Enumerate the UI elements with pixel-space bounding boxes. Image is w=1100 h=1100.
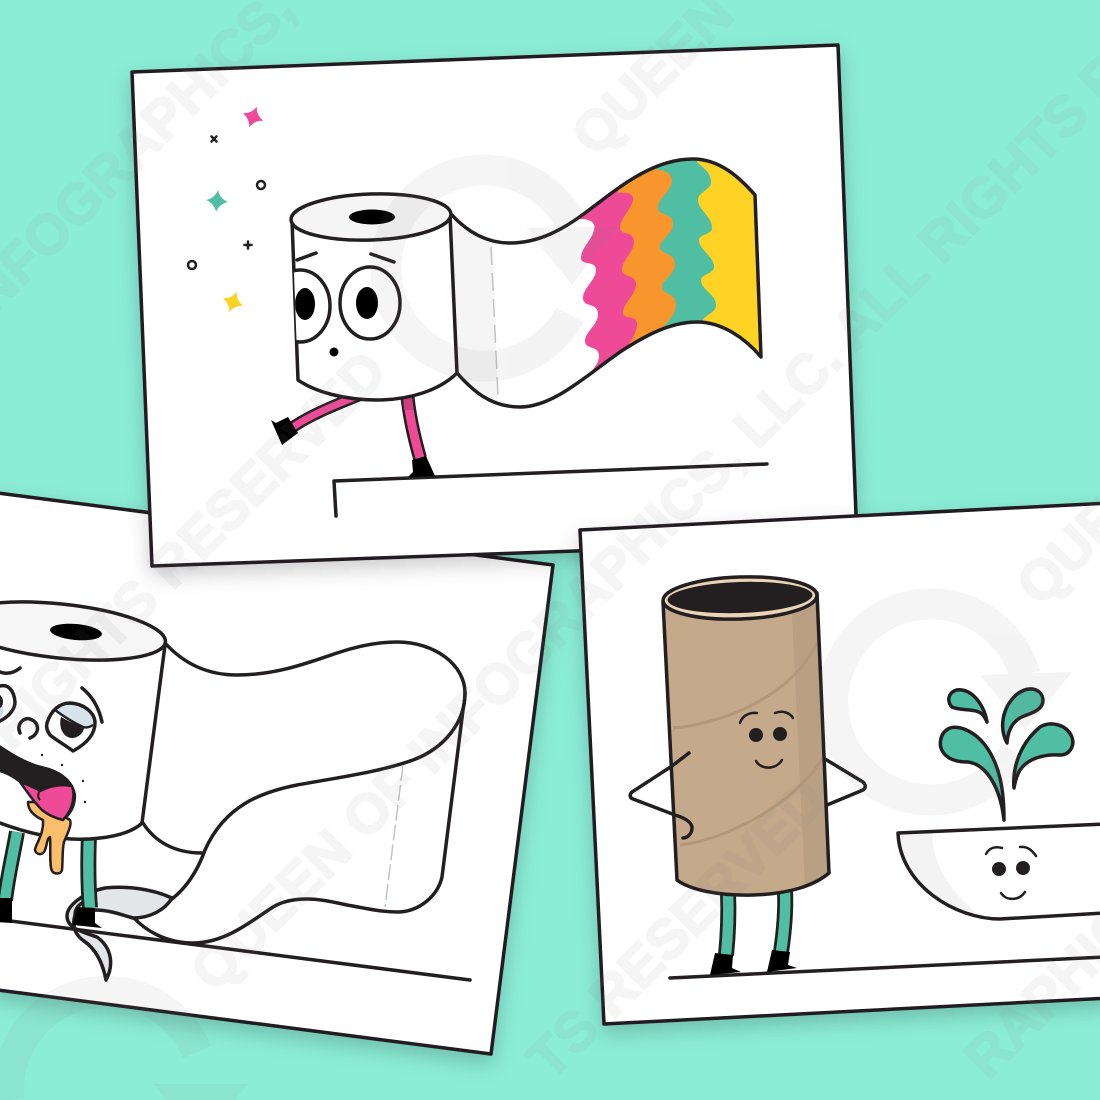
planter bowl	[898, 824, 1100, 919]
leg: right teal	[767, 891, 797, 972]
leg: back kicking	[271, 393, 365, 445]
rainbow stripes	[452, 160, 760, 401]
face: surprised expression	[294, 251, 402, 356]
dashed perforation	[491, 247, 498, 396]
card 3 sheet	[580, 503, 1100, 1024]
plant leaves	[940, 689, 1073, 820]
arm: right	[825, 759, 865, 805]
panel: happy toilet roll card	[132, 45, 857, 566]
roll hole	[49, 622, 103, 642]
freckles	[41, 754, 86, 803]
eye left	[0, 686, 15, 721]
arm: hand on tube	[672, 753, 692, 838]
leg: left teal	[710, 893, 741, 975]
brow right	[82, 688, 102, 722]
tube face	[740, 712, 793, 768]
tongue and drool	[20, 782, 73, 874]
tube opening	[667, 579, 813, 616]
brow left	[0, 668, 20, 673]
arm: left behind tube	[630, 766, 675, 815]
brows	[297, 253, 394, 262]
roll body	[0, 593, 168, 839]
bowl face	[986, 847, 1036, 899]
eye right	[47, 703, 95, 751]
eyes	[294, 265, 402, 344]
roll body	[290, 191, 457, 400]
roll hole	[349, 210, 395, 224]
floor ledge	[334, 464, 767, 516]
leg: left teal	[0, 832, 17, 923]
panel: sick toilet roll card	[0, 492, 553, 1054]
cardboard tube	[662, 574, 829, 895]
watermark text: TS RESERVED	[515, 767, 838, 1090]
card 1 sheet	[132, 45, 857, 566]
unrolled paper sheet	[130, 642, 465, 943]
mouth	[0, 743, 75, 820]
leg: right teal	[73, 835, 102, 928]
card 2 sheet	[0, 492, 553, 1054]
sparkles	[188, 103, 267, 316]
face: sick expression	[0, 668, 102, 874]
nose	[19, 719, 38, 738]
floor line	[0, 919, 470, 980]
nose	[330, 348, 338, 356]
curled paper tail	[67, 887, 172, 980]
panel: cardboard tube and plant card	[580, 503, 1100, 1024]
paper sheet with rainbow	[452, 157, 763, 409]
floor line	[670, 957, 1100, 978]
leg: front standing	[403, 392, 435, 477]
